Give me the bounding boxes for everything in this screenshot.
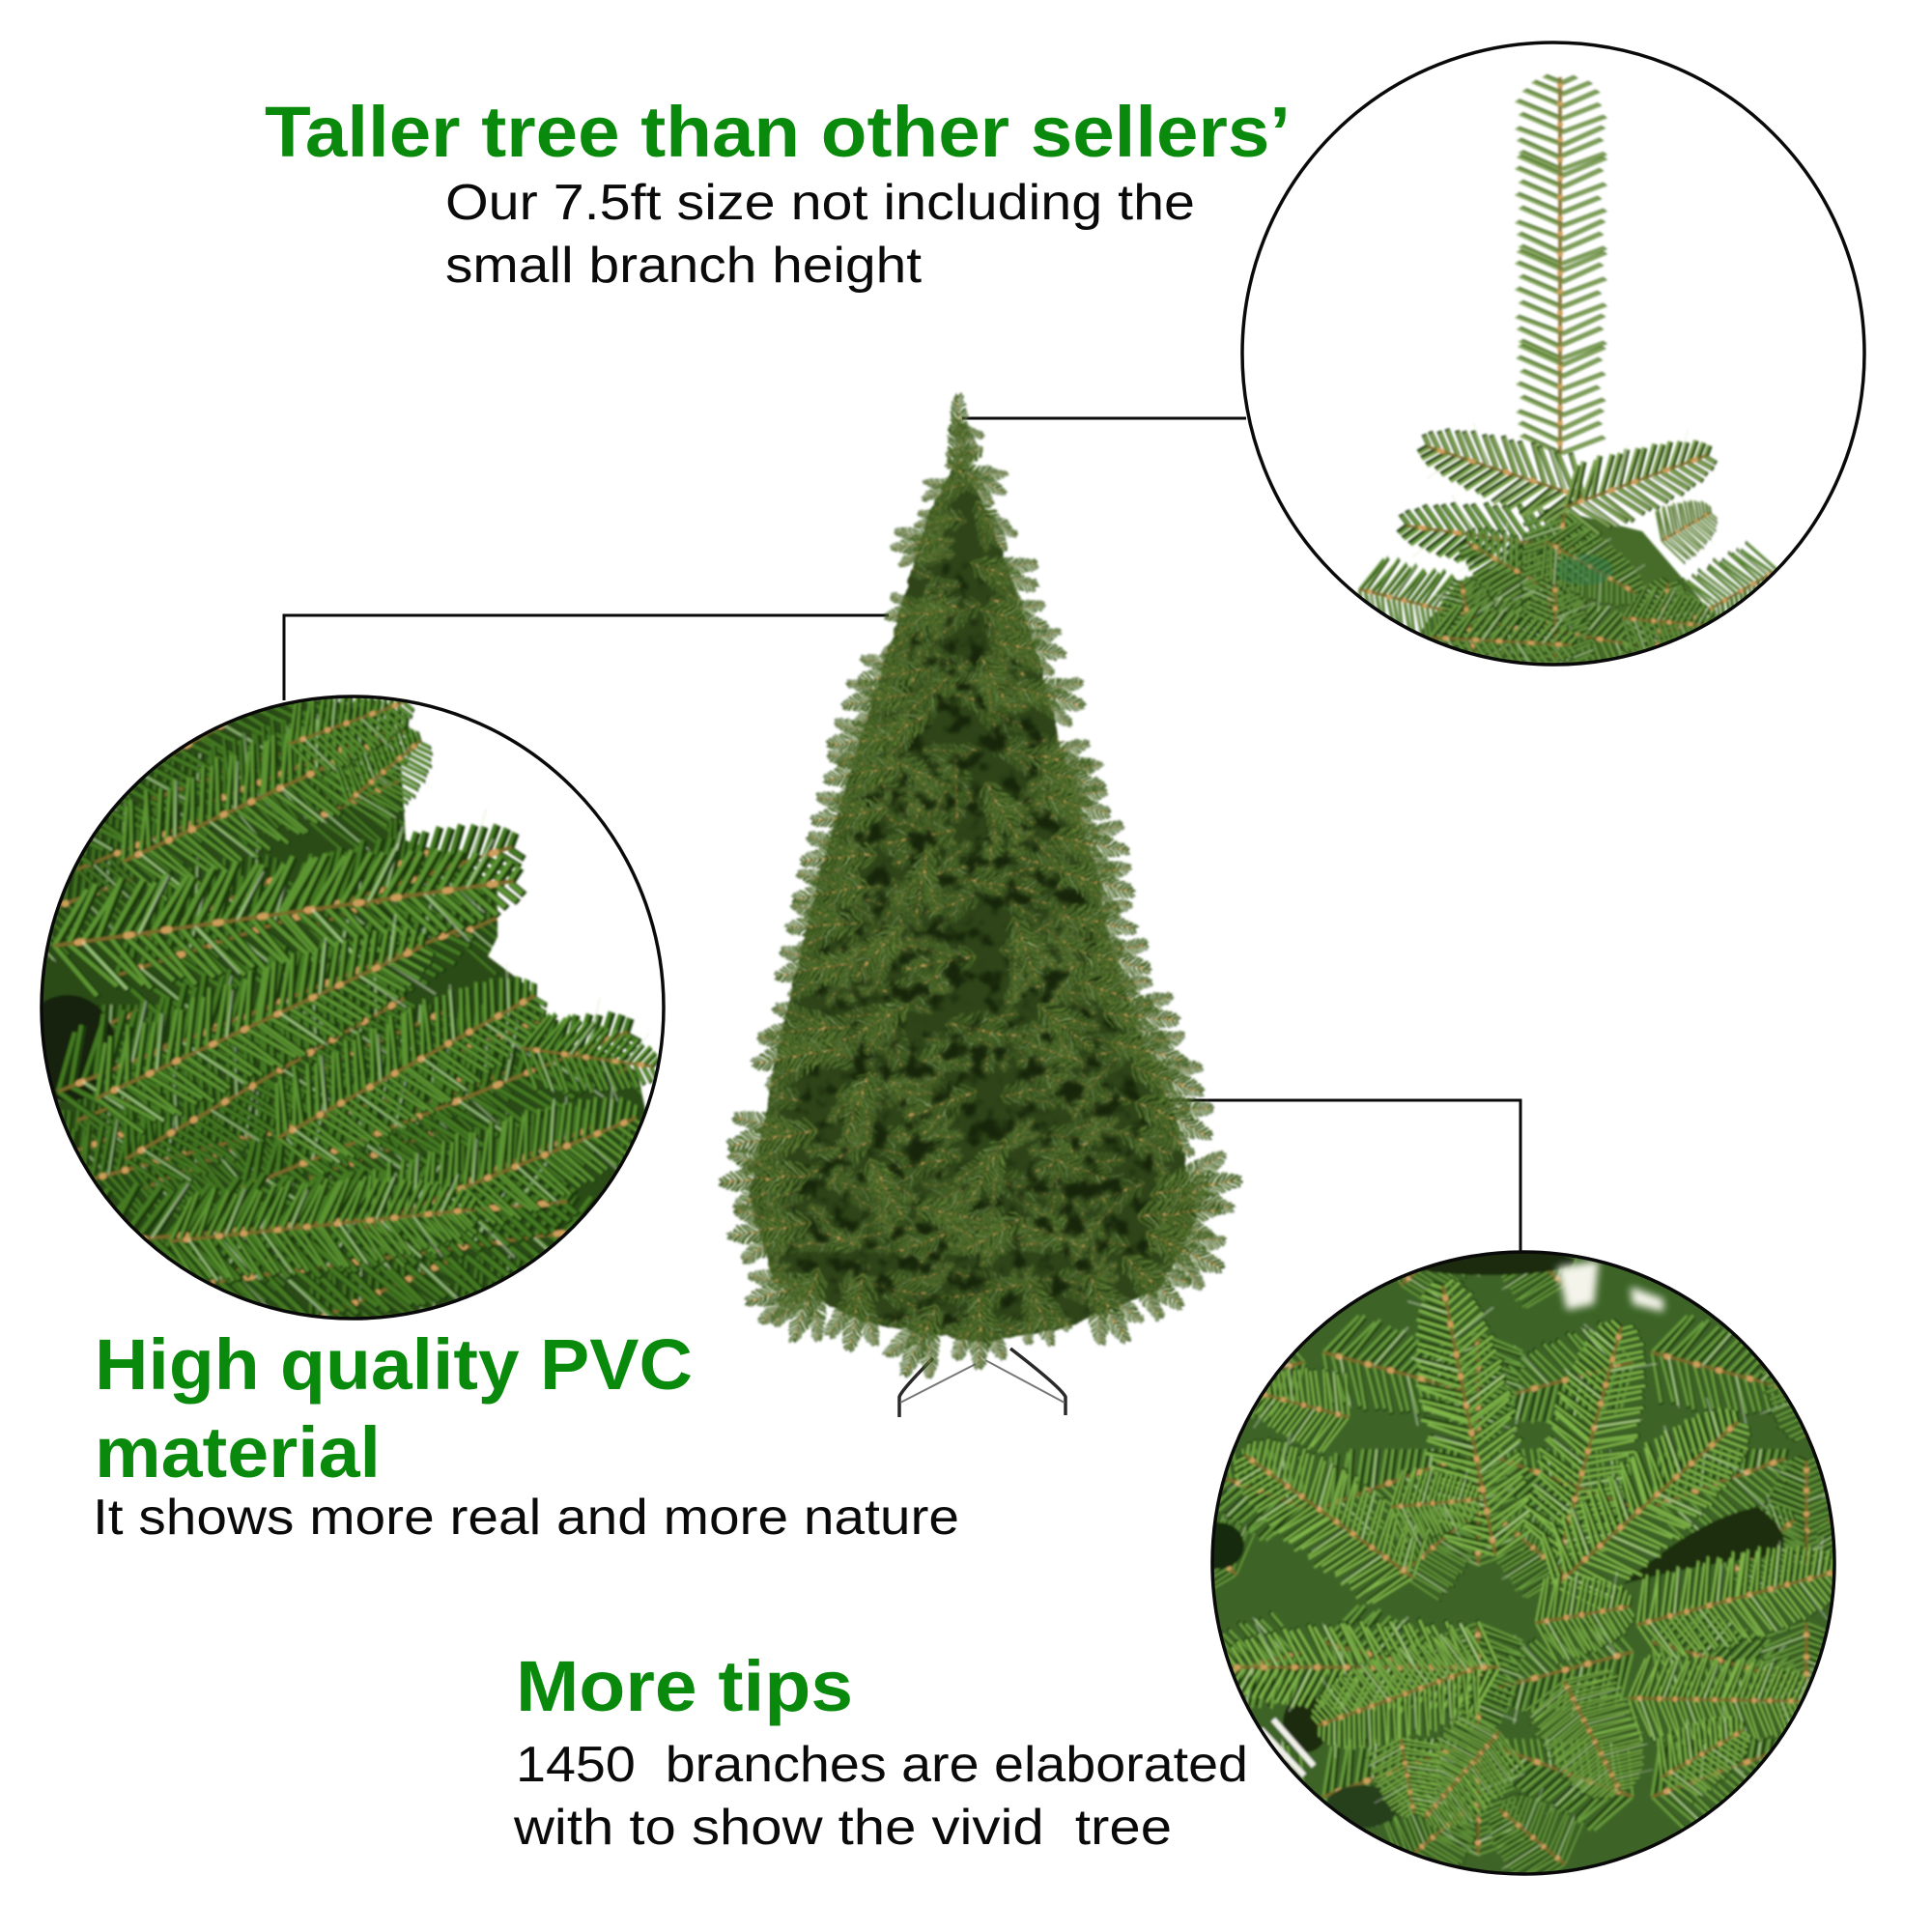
heading: PVC material: High quality PVC: [95, 1324, 693, 1405]
icon: metal stand: [899, 1349, 1065, 1417]
panel: central christmas tree: [716, 395, 1247, 1417]
heading: PVC material: [95, 1324, 693, 1492]
tree foliage: [716, 395, 1247, 1390]
text block: tree size note: [445, 175, 1195, 294]
heading: more tips: More tips: [516, 1646, 853, 1726]
photo: PVC needle branches: [43, 697, 659, 1318]
panel: PVC needles close-up circle: [40, 695, 666, 1321]
text block: tree size note: Our 7.5ft size not including the: [445, 175, 1195, 231]
photo: radiating branches: [1213, 1254, 1833, 1872]
photo: tree tip sprig: [1350, 75, 1798, 692]
heading: PVC material: material: [95, 1412, 381, 1492]
connector: tree to bottom circle: [1118, 1100, 1520, 1254]
text block: branch count: with to show the vivid tree: [513, 1800, 1172, 1856]
text block: PVC note: It shows more real and more nature: [93, 1490, 959, 1546]
text block: branch count: [513, 1737, 1248, 1856]
heading: taller tree: Taller tree than other sellers’: [265, 92, 1291, 172]
text block: tree size note: small branch height: [445, 238, 923, 294]
circle outline: [42, 696, 664, 1319]
circle outline: [1212, 1252, 1834, 1874]
text block: branch count: 1450 branches are elaborated: [516, 1737, 1248, 1793]
panel: branches close-up circle: [1194, 1236, 1855, 1893]
circle outline: [1242, 43, 1864, 665]
connector: tree to left circle: [284, 615, 889, 700]
panel: tree tip close-up circle: [1242, 43, 1864, 692]
connector: tree tip to top circle: [962, 417, 1246, 419]
